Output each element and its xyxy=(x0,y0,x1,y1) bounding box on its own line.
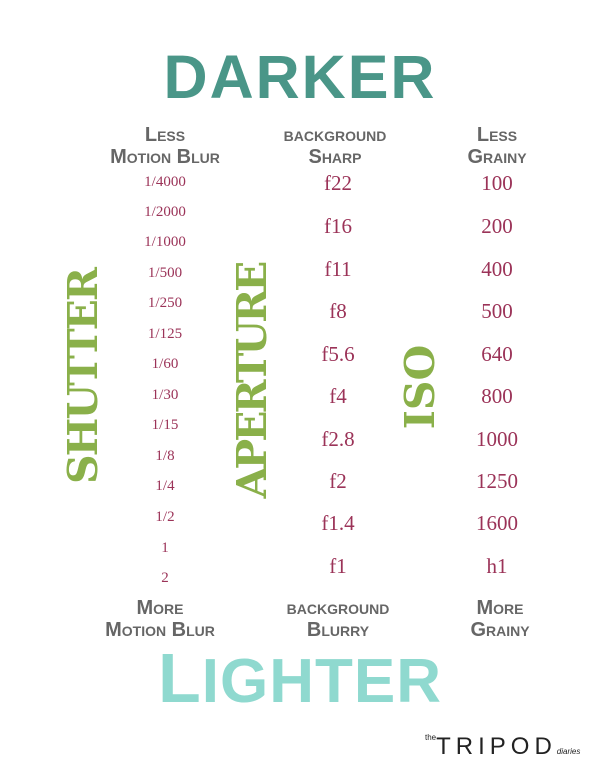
iso values: 1000 xyxy=(476,427,518,451)
header: iso bottom: Grainy xyxy=(470,619,530,641)
shutter values: 1/250 xyxy=(148,295,182,311)
shutter values: 1/2 xyxy=(155,509,175,525)
aperture values: f2.8 xyxy=(321,427,355,451)
header: shutter top: Less xyxy=(145,124,185,146)
iso values: 100 xyxy=(481,171,513,195)
iso values: 1250 xyxy=(476,469,518,493)
aperture values: f1.4 xyxy=(321,511,355,535)
header: aperture bottom: background xyxy=(287,597,389,619)
vertical label: shutter: SHUTTER xyxy=(59,269,107,484)
header: shutter top: Motion Blur xyxy=(110,146,220,168)
header: aperture top: Sharp xyxy=(308,146,362,168)
header: aperture top: background xyxy=(284,124,386,146)
iso values: 800 xyxy=(481,384,513,408)
iso values: h1 xyxy=(486,554,508,578)
header: shutter bottom: Motion Blur xyxy=(105,619,215,641)
shutter values: 1 xyxy=(161,540,169,556)
aperture values: f16 xyxy=(324,214,352,238)
shutter values: 1/15 xyxy=(152,417,178,433)
aperture values: f1 xyxy=(329,554,347,578)
header: aperture bottom: Blurry xyxy=(307,619,369,641)
header: shutter bottom xyxy=(105,597,215,641)
iso values: 1600 xyxy=(476,511,518,535)
title: lighter: LIGHTER xyxy=(158,639,442,717)
header: iso bottom: More xyxy=(476,597,524,619)
shutter values: 1/30 xyxy=(152,387,178,403)
iso values xyxy=(476,171,518,578)
aperture values xyxy=(321,171,355,578)
shutter values: 1/125 xyxy=(148,326,182,342)
aperture values: f11 xyxy=(324,257,352,281)
shutter values: 2 xyxy=(161,570,169,586)
logo: the tripod diaries: theTRIPODdiaries xyxy=(425,733,580,760)
vertical label: iso: ISO xyxy=(396,345,444,429)
vertical label: aperture: APERTURE xyxy=(228,264,276,498)
shutter values xyxy=(144,174,186,586)
header: iso top: Less xyxy=(477,124,517,146)
header: aperture bottom xyxy=(287,597,389,641)
iso values: 200 xyxy=(481,214,513,238)
shutter values: 1/4 xyxy=(155,478,175,494)
header: iso bottom xyxy=(470,597,530,641)
iso values: 400 xyxy=(481,257,513,281)
header: shutter top xyxy=(110,124,220,168)
aperture values: f4 xyxy=(329,384,347,408)
header: shutter bottom: More xyxy=(136,597,184,619)
aperture values: f5.6 xyxy=(321,342,355,366)
shutter values: 1/2000 xyxy=(144,204,186,220)
iso values: 500 xyxy=(481,299,513,323)
title: darker: DARKER xyxy=(164,43,436,111)
shutter values: 1/60 xyxy=(152,356,178,372)
shutter values: 1/1000 xyxy=(144,234,186,250)
shutter values: 1/500 xyxy=(148,265,182,281)
header: iso top xyxy=(467,124,527,168)
shutter values: 1/4000 xyxy=(144,174,186,190)
header: aperture top xyxy=(284,124,386,168)
aperture values: f8 xyxy=(329,299,347,323)
aperture values: f2 xyxy=(329,469,347,493)
iso values: 640 xyxy=(481,342,513,366)
aperture values: f22 xyxy=(324,171,352,195)
header: iso top: Grainy xyxy=(467,146,527,168)
shutter values: 1/8 xyxy=(155,448,175,464)
